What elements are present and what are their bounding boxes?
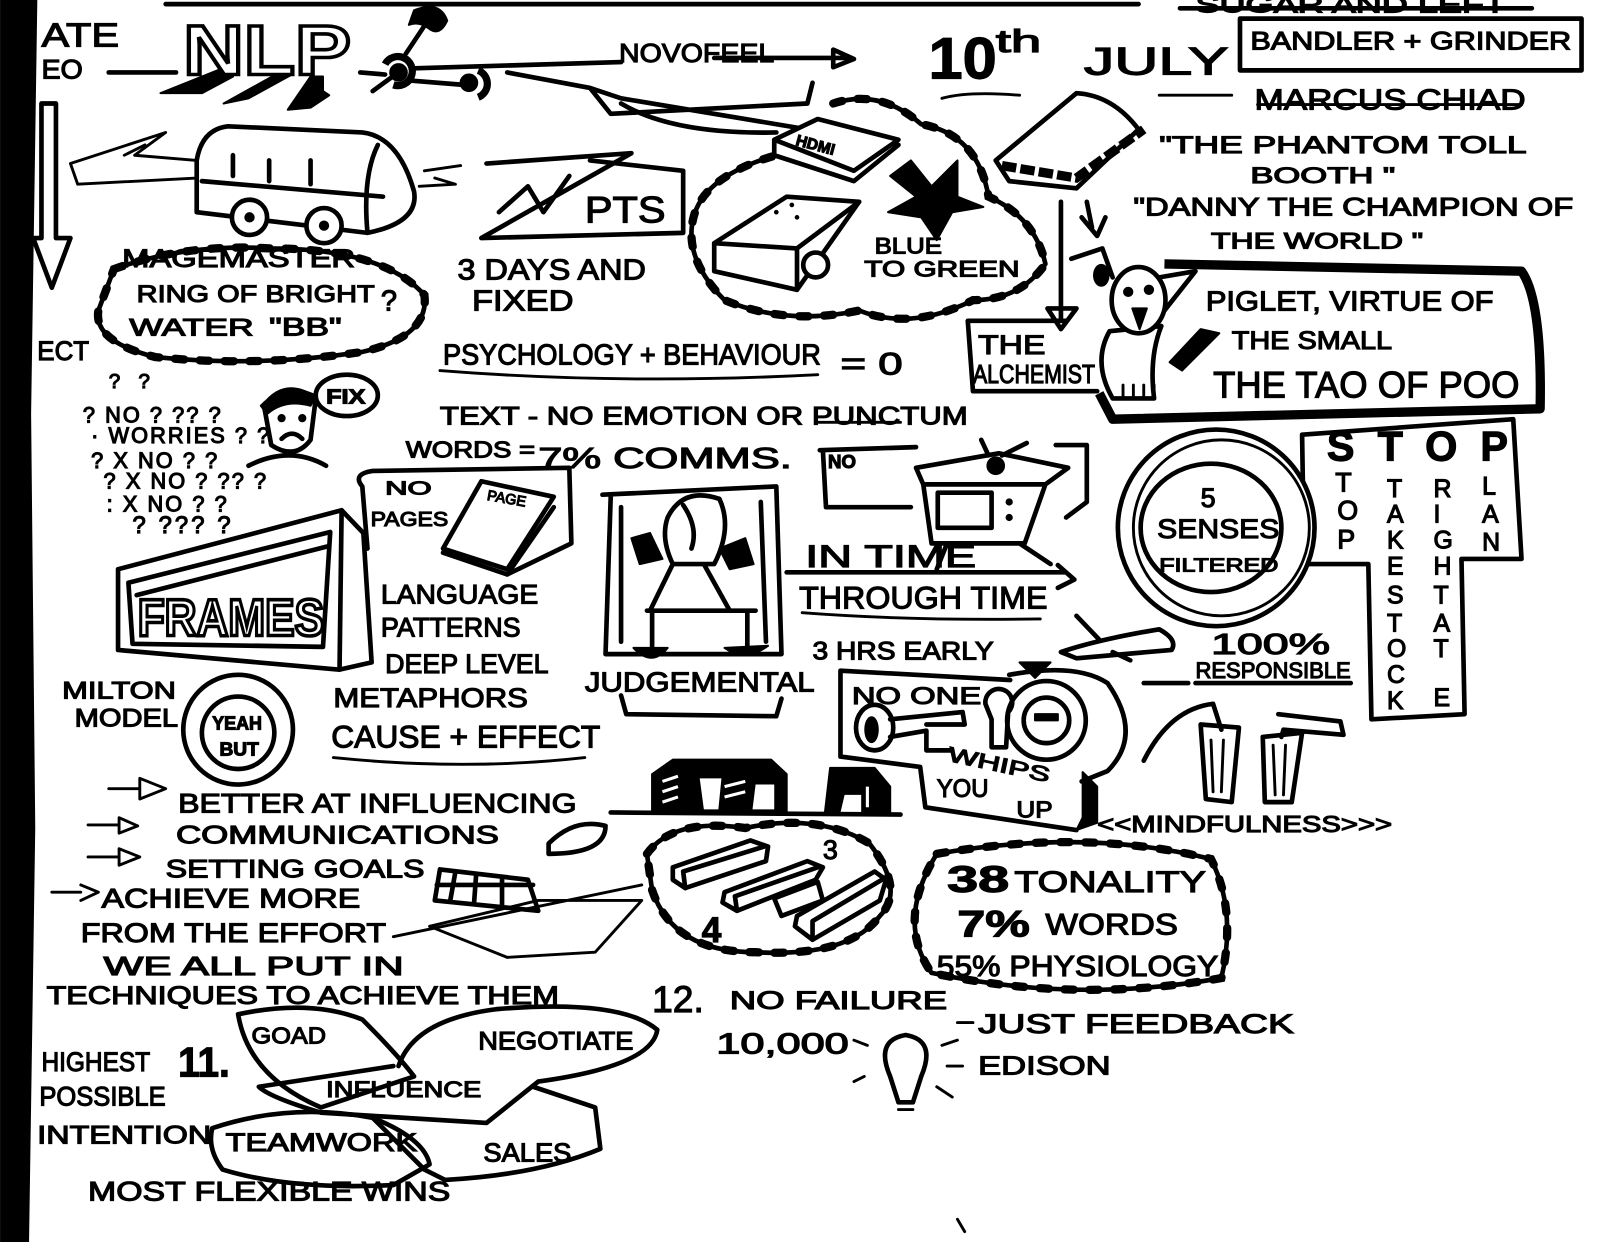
list: benefits: COMMUNICATIONS bbox=[176, 823, 499, 850]
text: 3 days and fixed: 3 DAYS AND bbox=[458, 254, 646, 286]
heading: psychology and behaviour: PSYCHOLOGY + BEHAVIOUR bbox=[443, 339, 821, 371]
book titles: BOOTH " bbox=[1250, 163, 1395, 188]
panel: stop take stock: N bbox=[1482, 530, 1500, 557]
panel: no one whips you up bbox=[840, 662, 1126, 830]
panel: stop take stock: S bbox=[1387, 582, 1404, 609]
icon: magnifier 5 senses filtered: FILTERED bbox=[1159, 554, 1278, 575]
question marks and worried man: ? ??? ? bbox=[133, 512, 234, 539]
text: 100% responsible: 100% bbox=[1211, 629, 1330, 661]
label: blue to green: BLUE bbox=[875, 234, 942, 259]
label: blue to green: TO GREEN bbox=[864, 256, 1020, 281]
icon: stack of books bbox=[996, 93, 1144, 329]
cloud: tonality words physiology: 55% PHYSIOLOGY bbox=[937, 951, 1218, 983]
panel: stop take stock: K bbox=[1387, 688, 1404, 715]
speech bubble: fix bbox=[316, 375, 378, 416]
icon: television bbox=[820, 440, 1087, 569]
text: 12 no failure: 10,000 bbox=[716, 1029, 849, 1061]
book titles: "DANNY THE CHAMPION OF bbox=[1133, 194, 1573, 221]
panel: stop take stock: T bbox=[1335, 468, 1352, 498]
question marks and worried man: ? X NO ? ?? ? bbox=[104, 469, 268, 494]
label: the alchemist bbox=[968, 321, 1097, 391]
panel: no one whips you up: UP bbox=[1016, 797, 1053, 823]
icon: no pages book: PAGE bbox=[486, 488, 528, 511]
panel: piglet, tao of pooh bbox=[1099, 264, 1540, 419]
text: 100% responsible bbox=[1144, 629, 1351, 683]
text: words 7% comms bbox=[406, 403, 968, 475]
panel: stop take stock: R bbox=[1434, 476, 1451, 503]
text: mindfulness: <<MINDFULNESS>>> bbox=[1097, 811, 1392, 837]
question marks and worried man: ? X NO ? ? bbox=[91, 448, 219, 473]
text: language patterns bbox=[331, 579, 600, 764]
question marks and worried man: ? ? bbox=[109, 370, 156, 393]
cloud: master ring of bright water bbox=[98, 246, 425, 361]
icon: target spiral bbox=[1007, 662, 1126, 781]
cloud: tonality words physiology bbox=[915, 842, 1227, 990]
text: milton model yeah but: MILTON bbox=[62, 678, 176, 705]
icon: no pages book bbox=[359, 468, 571, 574]
panel: stop take stock bbox=[1302, 419, 1522, 719]
venn: goal negotiate influence teamwork sales: GOAD bbox=[252, 1022, 326, 1048]
icon: black cross bbox=[888, 160, 983, 240]
icon: airplane bbox=[1061, 616, 1173, 660]
heading: psychology and behaviour: = 0 bbox=[840, 347, 903, 382]
list: benefits: ACHIEVE MORE bbox=[101, 884, 360, 914]
panel: stop take stock: E bbox=[1387, 553, 1404, 580]
label: the alchemist: THE bbox=[978, 330, 1045, 360]
icon: judge with scales: JUDGEMENTAL bbox=[585, 666, 815, 697]
icon: stonehenge bbox=[549, 760, 901, 854]
text: milton model yeah but bbox=[62, 675, 293, 785]
panel: stop take stock: T bbox=[1387, 476, 1402, 503]
heading: psychology and behaviour bbox=[440, 339, 903, 382]
text: words 7% comms: 7% COMMS. bbox=[538, 443, 792, 475]
text: 12 no failure: NO FAILURE bbox=[730, 988, 947, 1015]
panel: stop take stock: P bbox=[1337, 525, 1355, 555]
panel: no one whips you up: YOU bbox=[937, 776, 988, 803]
book titles bbox=[1133, 132, 1573, 253]
text: highest possible intention bbox=[37, 1039, 230, 1150]
list: benefits: WE ALL PUT IN bbox=[104, 953, 404, 981]
panel: stop take stock: O bbox=[1387, 636, 1406, 663]
list: benefits: SETTING GOALS bbox=[166, 857, 424, 884]
text: milton model yeah but: BUT bbox=[219, 739, 259, 760]
text: 12 no failure: EDISON bbox=[978, 1052, 1111, 1080]
venn: goal negotiate influence teamwork sales: TEAMWORK bbox=[226, 1130, 418, 1157]
text: highest possible intention: POSSIBLE bbox=[39, 1081, 166, 1111]
book titles: THE WORLD " bbox=[1211, 228, 1423, 253]
panel: stop take stock: STOP bbox=[1327, 424, 1508, 470]
panel: no one whips you up: NO ONE bbox=[852, 683, 981, 710]
cloud: tonality words physiology: WORDS bbox=[1045, 909, 1178, 942]
question marks and worried man: ? NO ? ?? ? bbox=[83, 402, 223, 427]
banner: frames bbox=[118, 510, 372, 670]
text: language patterns: DEEP LEVEL bbox=[385, 649, 549, 679]
venn: goal negotiate influence teamwork sales: NEGOTIATE bbox=[478, 1028, 633, 1055]
panel: stop take stock: C bbox=[1387, 662, 1405, 689]
text: 3 days and fixed bbox=[458, 254, 646, 318]
book titles: "THE PHANTOM TOLL bbox=[1159, 132, 1527, 159]
cloud: master ring of bright water: WATER bbox=[129, 314, 254, 341]
icon: magnifier 5 senses filtered: SENSES bbox=[1157, 514, 1279, 544]
date: 10th July: th bbox=[996, 24, 1041, 59]
venn: goal negotiate influence teamwork sales: INFLUENCE bbox=[326, 1077, 481, 1102]
text: in time, through time: IN TIME bbox=[805, 539, 976, 574]
cloud: tonality words physiology: 38 bbox=[947, 858, 1009, 900]
cloud: 3 and 4 blocks: 4 bbox=[702, 911, 722, 950]
text: highest possible intention: 11. bbox=[178, 1039, 230, 1085]
text: milton model yeah but: YEAH bbox=[212, 713, 262, 734]
icon: worried man bbox=[248, 390, 326, 466]
text: 3 hrs early: 3 HRS EARLY bbox=[813, 638, 994, 665]
icon: projector bbox=[714, 197, 859, 290]
icon: magnifier 5 senses filtered: 5 bbox=[1201, 483, 1216, 513]
panel: piglet, tao of pooh: THE TAO OF POO bbox=[1213, 363, 1519, 405]
panel: stop take stock: T bbox=[1387, 610, 1402, 637]
panel: stop take stock: A bbox=[1482, 502, 1499, 529]
text: in time, through time: THROUGH TIME bbox=[799, 581, 1047, 616]
margin fragment: date: ATE bbox=[41, 18, 119, 55]
cloud: blue to green projector bbox=[691, 99, 1045, 319]
text: language patterns: LANGUAGE bbox=[381, 579, 538, 609]
icon: magnifier 5 senses filtered bbox=[1118, 430, 1315, 626]
banner: frames: FRAMES bbox=[138, 588, 324, 646]
panel: stop take stock: H bbox=[1434, 553, 1451, 580]
text: words 7% comms: WORDS = bbox=[406, 436, 535, 462]
panel: stop take stock: E bbox=[1434, 685, 1450, 712]
question marks and worried man bbox=[83, 370, 378, 539]
list: benefits bbox=[47, 778, 577, 1010]
icon: light bulb bbox=[854, 1035, 963, 1110]
text: in time, through time bbox=[787, 539, 1074, 619]
text: highest possible intention: INTENTION bbox=[37, 1123, 211, 1150]
list: benefits: BETTER AT INFLUENCING bbox=[178, 788, 577, 818]
label: Marcus Chiad: MARCUS CHIAD bbox=[1254, 85, 1526, 117]
box: Bandler and Grinder: BANDLER + GRINDER bbox=[1250, 29, 1571, 56]
label: novofeel with arrow bbox=[619, 40, 854, 68]
panel: stop take stock: G bbox=[1434, 528, 1453, 555]
icon: 3 points box: PTS bbox=[585, 189, 666, 231]
text: 12 no failure: JUST FEEDBACK bbox=[978, 1009, 1294, 1039]
text: language patterns: CAUSE + EFFECT bbox=[331, 719, 600, 754]
cloud: master ring of bright water: "BB" bbox=[269, 314, 342, 341]
list: benefits: FROM THE EFFORT bbox=[81, 918, 386, 948]
date: 10th July bbox=[928, 24, 1232, 98]
venn: goal negotiate influence teamwork sales: SALES bbox=[483, 1139, 571, 1167]
margin fragment: date: EO bbox=[41, 55, 83, 85]
icon: television: NO bbox=[828, 451, 856, 472]
list: benefits: TECHNIQUES TO ACHIEVE THEM bbox=[47, 983, 559, 1010]
panel: piglet, tao of pooh: PIGLET, VIRTUE OF bbox=[1206, 286, 1494, 317]
road from molecule to cloud bbox=[507, 72, 813, 133]
text: words 7% comms: TEXT - NO EMOTION OR PUNCTUM bbox=[440, 403, 968, 430]
icon: HDMI block: HDMI bbox=[794, 132, 837, 159]
venn: goal negotiate influence teamwork sales bbox=[211, 1007, 657, 1186]
cloud: master ring of bright water: ? bbox=[381, 286, 397, 318]
icon: key and keyhole bbox=[856, 689, 1012, 750]
panel: stop take stock: K bbox=[1387, 528, 1404, 555]
page edge shadow bbox=[0, 0, 37, 1242]
margin fragment: date bbox=[41, 18, 119, 85]
cloud: 3 and 4 blocks: 3 bbox=[823, 835, 838, 865]
icon: large arrow left margin bbox=[33, 104, 70, 288]
panel: no one whips you up: WHIPS bbox=[946, 743, 1052, 787]
panel: stop take stock: L bbox=[1482, 474, 1496, 501]
panel: stop take stock: A bbox=[1434, 610, 1451, 637]
heading: NLP with shadows bbox=[109, 11, 351, 110]
icon: road and camper van bbox=[70, 126, 461, 243]
text: highest possible intention: HIGHEST bbox=[41, 1047, 150, 1077]
icon: two drinks with straws bbox=[1144, 704, 1343, 802]
label: novofeel with arrow: NOVOFEEL bbox=[619, 40, 774, 68]
panel: stop take stock: A bbox=[1387, 502, 1404, 529]
icon: judge with scales bbox=[585, 486, 815, 716]
speech bubble: fix: FIX bbox=[326, 386, 366, 409]
cloud: master ring of bright water: MAGEMASTER bbox=[122, 246, 355, 273]
heading: NLP with shadows: NLP bbox=[183, 11, 351, 90]
icon: molecule bbox=[360, 7, 621, 97]
icon: goal net on pitch bbox=[393, 869, 642, 957]
icon: piglet bbox=[1071, 248, 1219, 398]
cloud: 3 and 4 blocks bbox=[647, 823, 891, 953]
panel: stop take stock: I bbox=[1434, 502, 1440, 529]
icon: HDMI block bbox=[774, 119, 898, 181]
question marks and worried man: · WORRIES ? ? bbox=[91, 423, 271, 448]
icon: no pages book: NO bbox=[385, 478, 432, 499]
label: the alchemist: ALCHEMIST bbox=[973, 361, 1095, 389]
date: 10th July: 10 bbox=[928, 28, 997, 92]
text: most flexible wins: MOST FLEXIBLE WINS bbox=[88, 1177, 450, 1207]
text: milton model yeah but: MODEL bbox=[75, 706, 178, 733]
cloud: master ring of bright water: RING OF BRIGHT bbox=[137, 281, 375, 308]
text: language patterns: PATTERNS bbox=[381, 613, 521, 643]
cloud: tonality words physiology: TONALITY bbox=[1014, 866, 1206, 899]
date: 10th July: JULY bbox=[1084, 40, 1229, 84]
text fragment: margin: ECT bbox=[37, 336, 89, 366]
panel: stop take stock: T bbox=[1434, 636, 1449, 663]
text: 3 days and fixed: FIXED bbox=[472, 286, 573, 318]
panel: piglet, tao of pooh: THE SMALL bbox=[1232, 328, 1392, 355]
text: 12 no failure: 12. bbox=[652, 978, 704, 1020]
box: Bandler and Grinder bbox=[1195, 0, 1582, 70]
text: 100% responsible: RESPONSIBLE bbox=[1195, 658, 1351, 683]
icon: 3 points box bbox=[481, 153, 683, 238]
label: blue to green bbox=[864, 234, 1020, 281]
header rules bbox=[166, 4, 1532, 8]
panel: stop take stock: O bbox=[1337, 496, 1358, 526]
question marks and worried man: : X NO ? ? bbox=[107, 491, 229, 516]
text: language patterns: METAPHORS bbox=[333, 683, 528, 713]
text: 12 no failure bbox=[652, 978, 1294, 1110]
cloud: tonality words physiology: 7% bbox=[957, 903, 1030, 945]
panel: stop take stock: T bbox=[1434, 582, 1449, 609]
icon: no pages book: PAGES bbox=[371, 508, 448, 531]
mark: bottom tick bbox=[957, 1219, 965, 1232]
